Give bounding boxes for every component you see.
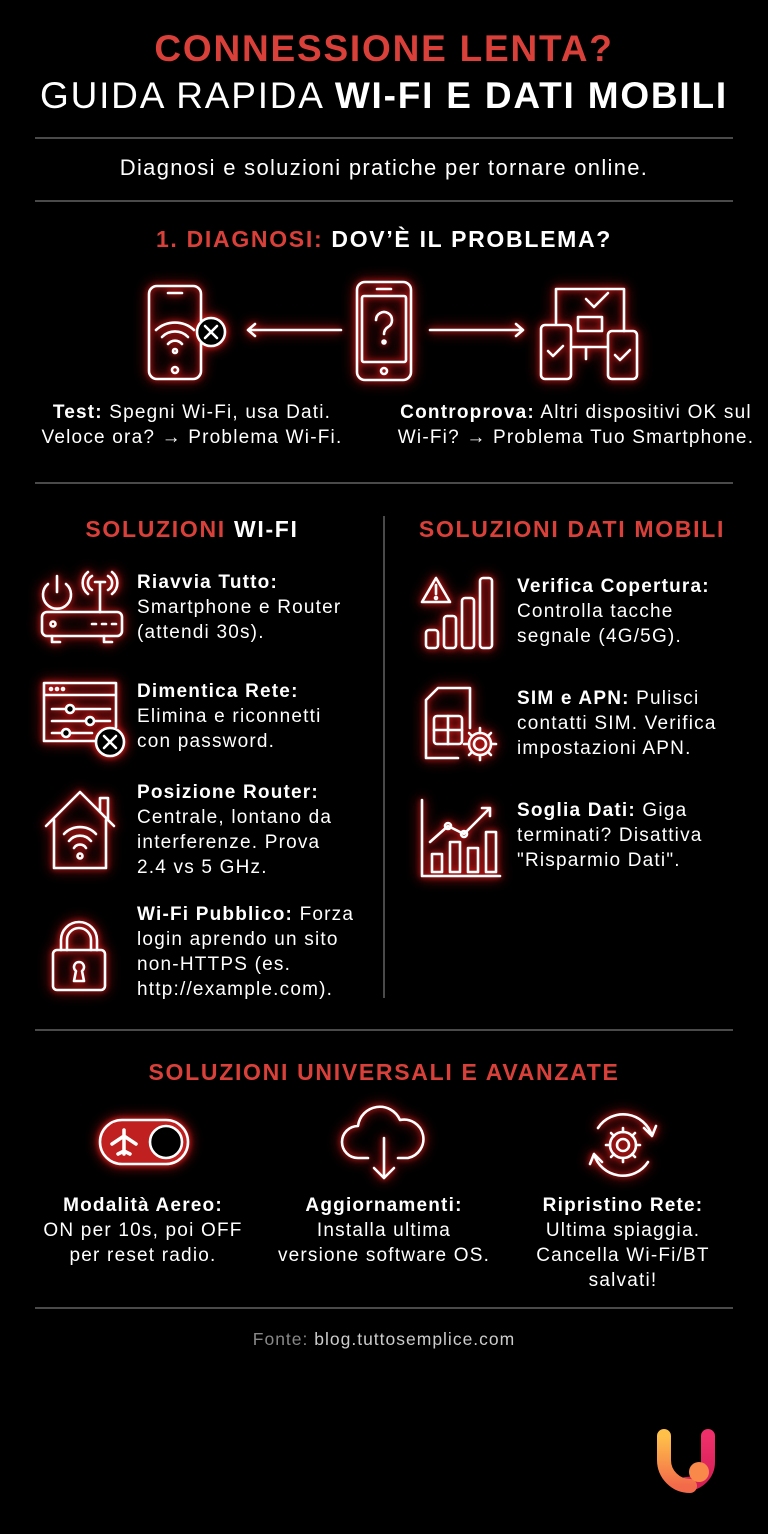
item: riavvia: [30, 564, 341, 652]
arrow left: [239, 316, 348, 344]
icon: reset gear: [580, 1103, 666, 1187]
text: controprova: Wi-Fi? → Problema Tuo Smartphone.: [398, 427, 754, 448]
text: ripristino: [536, 1195, 710, 1291]
text: impostazioni APN.: [517, 738, 692, 759]
text: modalità aereo: per reset radio.: [70, 1245, 216, 1266]
text: interferenze. Prova: [137, 832, 320, 853]
icon: settings x: [32, 671, 136, 768]
item: soglia: [410, 793, 703, 888]
text: [517, 800, 703, 871]
text: contatti SIM. Verifica: [517, 713, 717, 734]
icon: phone wifi off: [137, 274, 236, 390]
icon: signal bars: [413, 568, 504, 659]
text: con password.: [137, 731, 275, 752]
text: [517, 576, 710, 647]
text: modalità aereo: ON per 10s, poi OFF: [43, 1220, 243, 1241]
text: ripristino: Cancella Wi-Fi/BT: [536, 1245, 710, 1266]
item: dimentica: [32, 671, 322, 768]
text: test: Test: Spegni Wi-Fi, usa Dati.: [53, 402, 331, 423]
icon: house wifi: [38, 783, 122, 880]
heading: soluzioni dati: SOLUZIONI DATI MOBILI: [419, 516, 725, 542]
text: Riavvia Tutto:: [137, 572, 278, 593]
text: segnale (4G/5G).: [517, 626, 682, 647]
text: http://example.com).: [137, 979, 333, 1000]
text: test: Veloce ora? → Problema Wi-Fi.: [42, 427, 342, 448]
text: login aprendo un sito: [137, 929, 339, 950]
heading: diagnosi: 1. DIAGNOSI: DOV’È IL PROBLEMA?: [156, 226, 612, 252]
item: posizione: [38, 782, 332, 880]
text: Elimina e riconnetti: [137, 706, 322, 727]
title: [40, 28, 728, 116]
item: pubblico: [41, 904, 354, 1002]
text: terminati? Disattiva: [517, 825, 703, 846]
title: CONNESSIONE LENTA?: [154, 28, 614, 69]
text: controprova: Controprova: Altri dispositivi OK sul: [400, 402, 752, 423]
source: Fonte: blog.tuttosemplice.com: [253, 1329, 515, 1349]
icon: router power: [30, 564, 134, 652]
text: ripristino: salvati!: [589, 1270, 657, 1291]
text: ripristino: Ultima spiaggia.: [546, 1220, 700, 1241]
text: [137, 572, 341, 643]
icon: chart: [410, 793, 508, 888]
item: sim: [414, 676, 717, 770]
text: Dimentica Rete:: [137, 681, 299, 702]
icon: sim gear: [414, 676, 504, 770]
text: Smartphone e Router: [137, 597, 341, 618]
text: modalità aereo: Modalità Aereo:: [63, 1195, 223, 1216]
icon: airplane toggle: [88, 1108, 200, 1176]
text: non-HTTPS (es.: [137, 954, 291, 975]
text: test: [42, 402, 342, 448]
text: ripristino: Ripristino Rete:: [543, 1195, 703, 1216]
icon: phone question: [345, 270, 423, 392]
text: Posizione Router:: [137, 782, 319, 803]
text: "Risparmio Dati".: [517, 850, 681, 871]
text: aggiornamenti: Aggiornamenti:: [305, 1195, 463, 1216]
icon: cloud download: [331, 1096, 434, 1188]
subtitle: Diagnosi e soluzioni pratiche per tornare online.: [120, 155, 648, 180]
title: GUIDA RAPIDA WI-FI E DATI MOBILI: [40, 75, 728, 116]
heading: universali: SOLUZIONI UNIVERSALI E AVANZATE: [149, 1059, 619, 1085]
icon: devices ok: [529, 277, 649, 390]
text: modalità aereo: [43, 1195, 243, 1266]
text: Controlla tacche: [517, 601, 674, 622]
text: Verifica Copertura:: [517, 576, 710, 597]
arrow right: [424, 316, 532, 344]
text: Soglia Dati: Giga: [517, 800, 687, 821]
text: Wi-Fi Pubblico: Forza: [137, 904, 354, 925]
text: aggiornamenti: Installa ultima: [317, 1220, 451, 1241]
text: 2.4 vs 5 GHz.: [137, 857, 268, 878]
text: (attendi 30s).: [137, 622, 265, 643]
logo: [657, 1429, 715, 1493]
text: [137, 904, 354, 1000]
text: SIM e APN: Pulisci: [517, 688, 699, 709]
text: Centrale, lontano da: [137, 807, 332, 828]
text: [137, 681, 322, 752]
text: [517, 688, 717, 759]
text: aggiornamenti: versione software OS.: [278, 1245, 490, 1266]
text: aggiornamenti: [278, 1195, 490, 1266]
text: [137, 782, 332, 878]
text: controprova: [398, 402, 754, 448]
item: copertura: [413, 568, 710, 659]
heading: soluzioni wifi: SOLUZIONI WI-FI: [85, 516, 299, 542]
icon: lock: [41, 911, 117, 1002]
